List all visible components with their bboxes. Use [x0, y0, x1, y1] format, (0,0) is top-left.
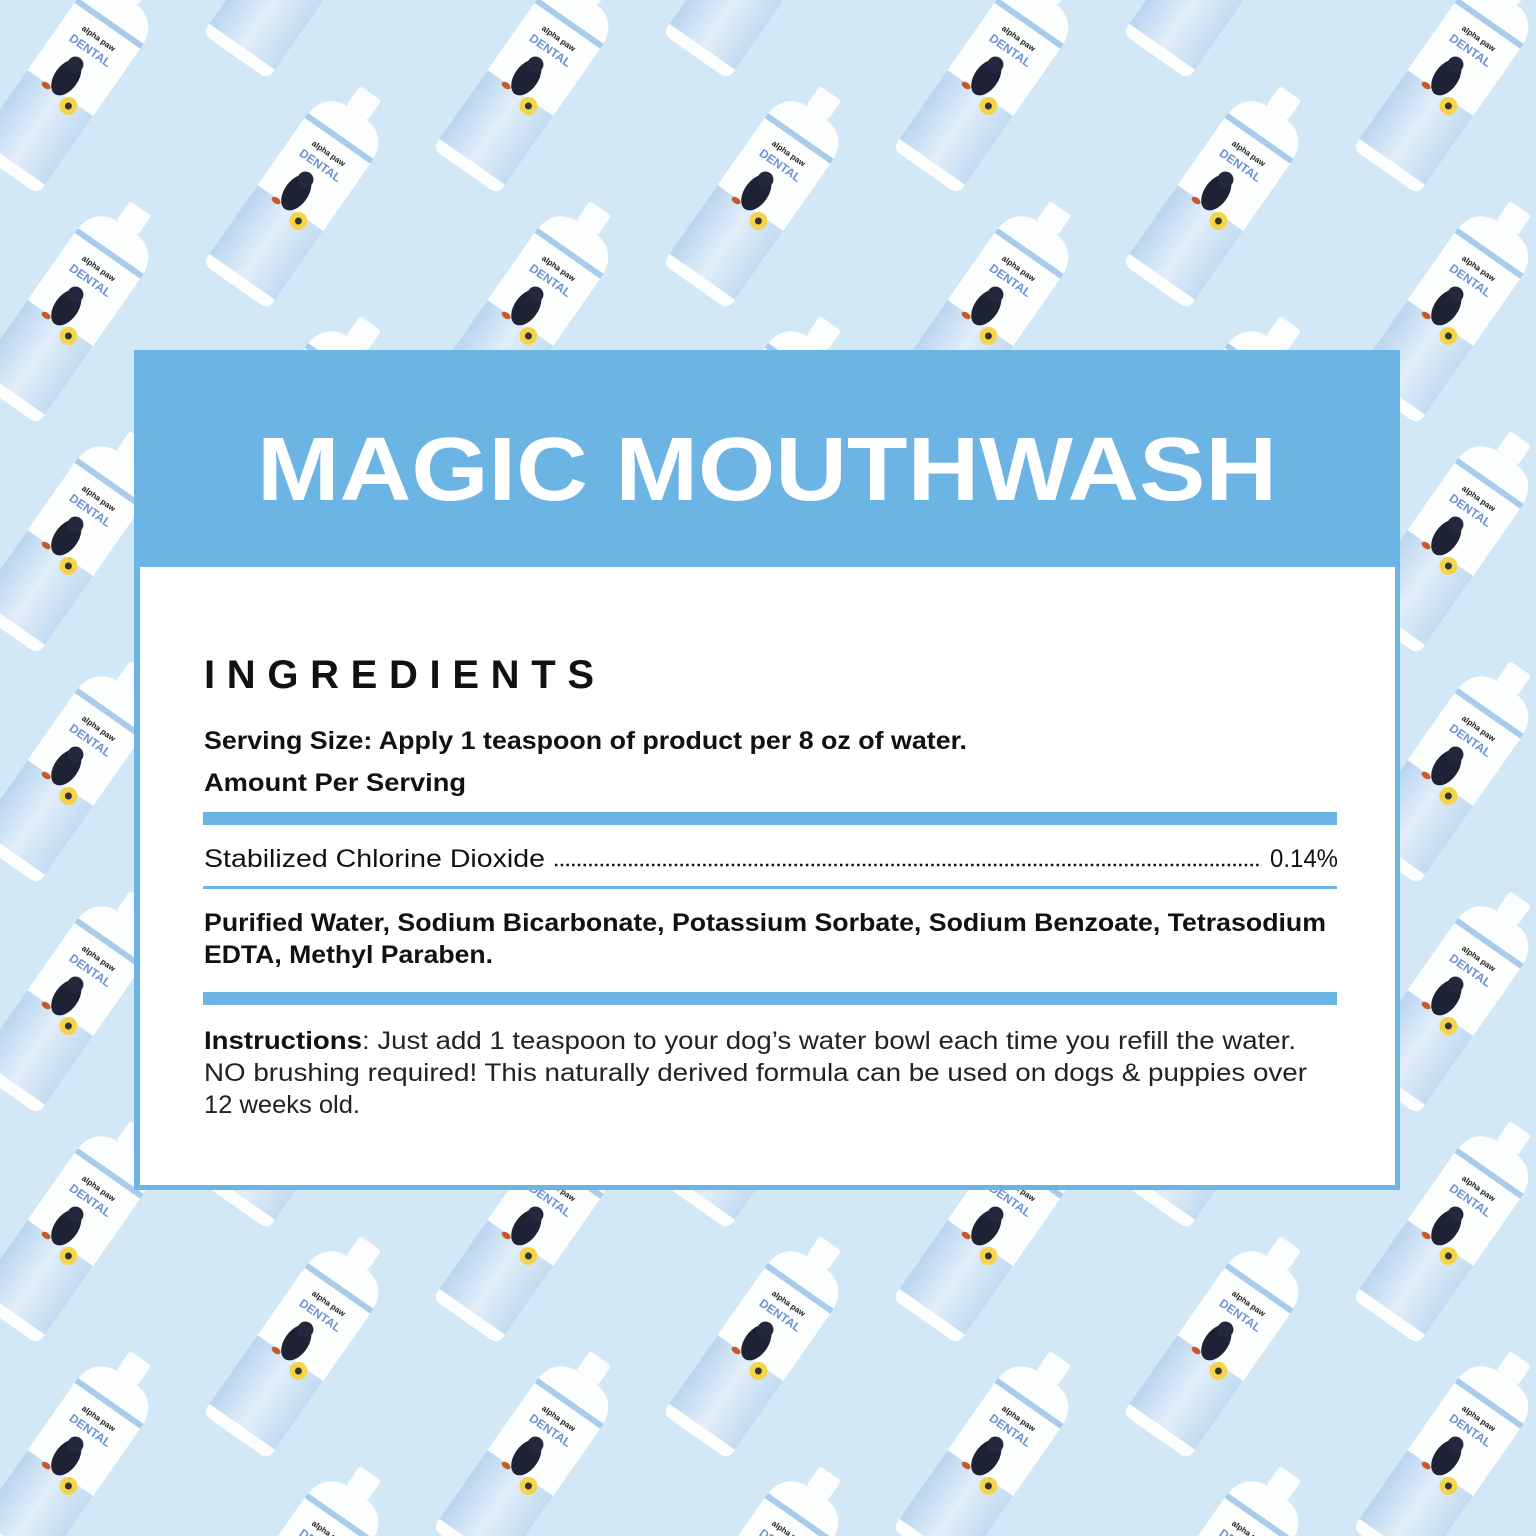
amount per serving: Amount Per Serving — [204, 769, 466, 797]
instructions: Instructions : Just add 1 teaspoon to your dog’s water bowl each time you refill the water. — [204, 1027, 1296, 1055]
other ingredients: EDTA, Methyl Paraben. — [204, 941, 493, 969]
panel: ingredients card — [134, 350, 1400, 1190]
stabilized chlorine dioxide row: 0.14% — [1270, 845, 1338, 873]
heading: ingredients: INGREDIENTS — [204, 653, 594, 697]
other ingredients — [204, 909, 1326, 969]
stabilized chlorine dioxide row: Stabilized Chlorine Dioxide — [204, 845, 545, 873]
title: MAGIC MOUTHWASH — [257, 420, 1277, 520]
instructions: 12 weeks old. — [204, 1091, 360, 1119]
instructions: NO brushing required! This naturally derived formula can be used on dogs & puppies over — [204, 1059, 1307, 1087]
stabilized chlorine dioxide row — [204, 845, 1338, 873]
instructions — [204, 1027, 1307, 1119]
serving size: Serving Size: Apply 1 teaspoon of product per 8 oz of water. — [204, 727, 967, 755]
other ingredients: Purified Water, Sodium Bicarbonate, Potassium Sorbate, Sodium Benzoate, Tetrasodium — [204, 909, 1326, 937]
